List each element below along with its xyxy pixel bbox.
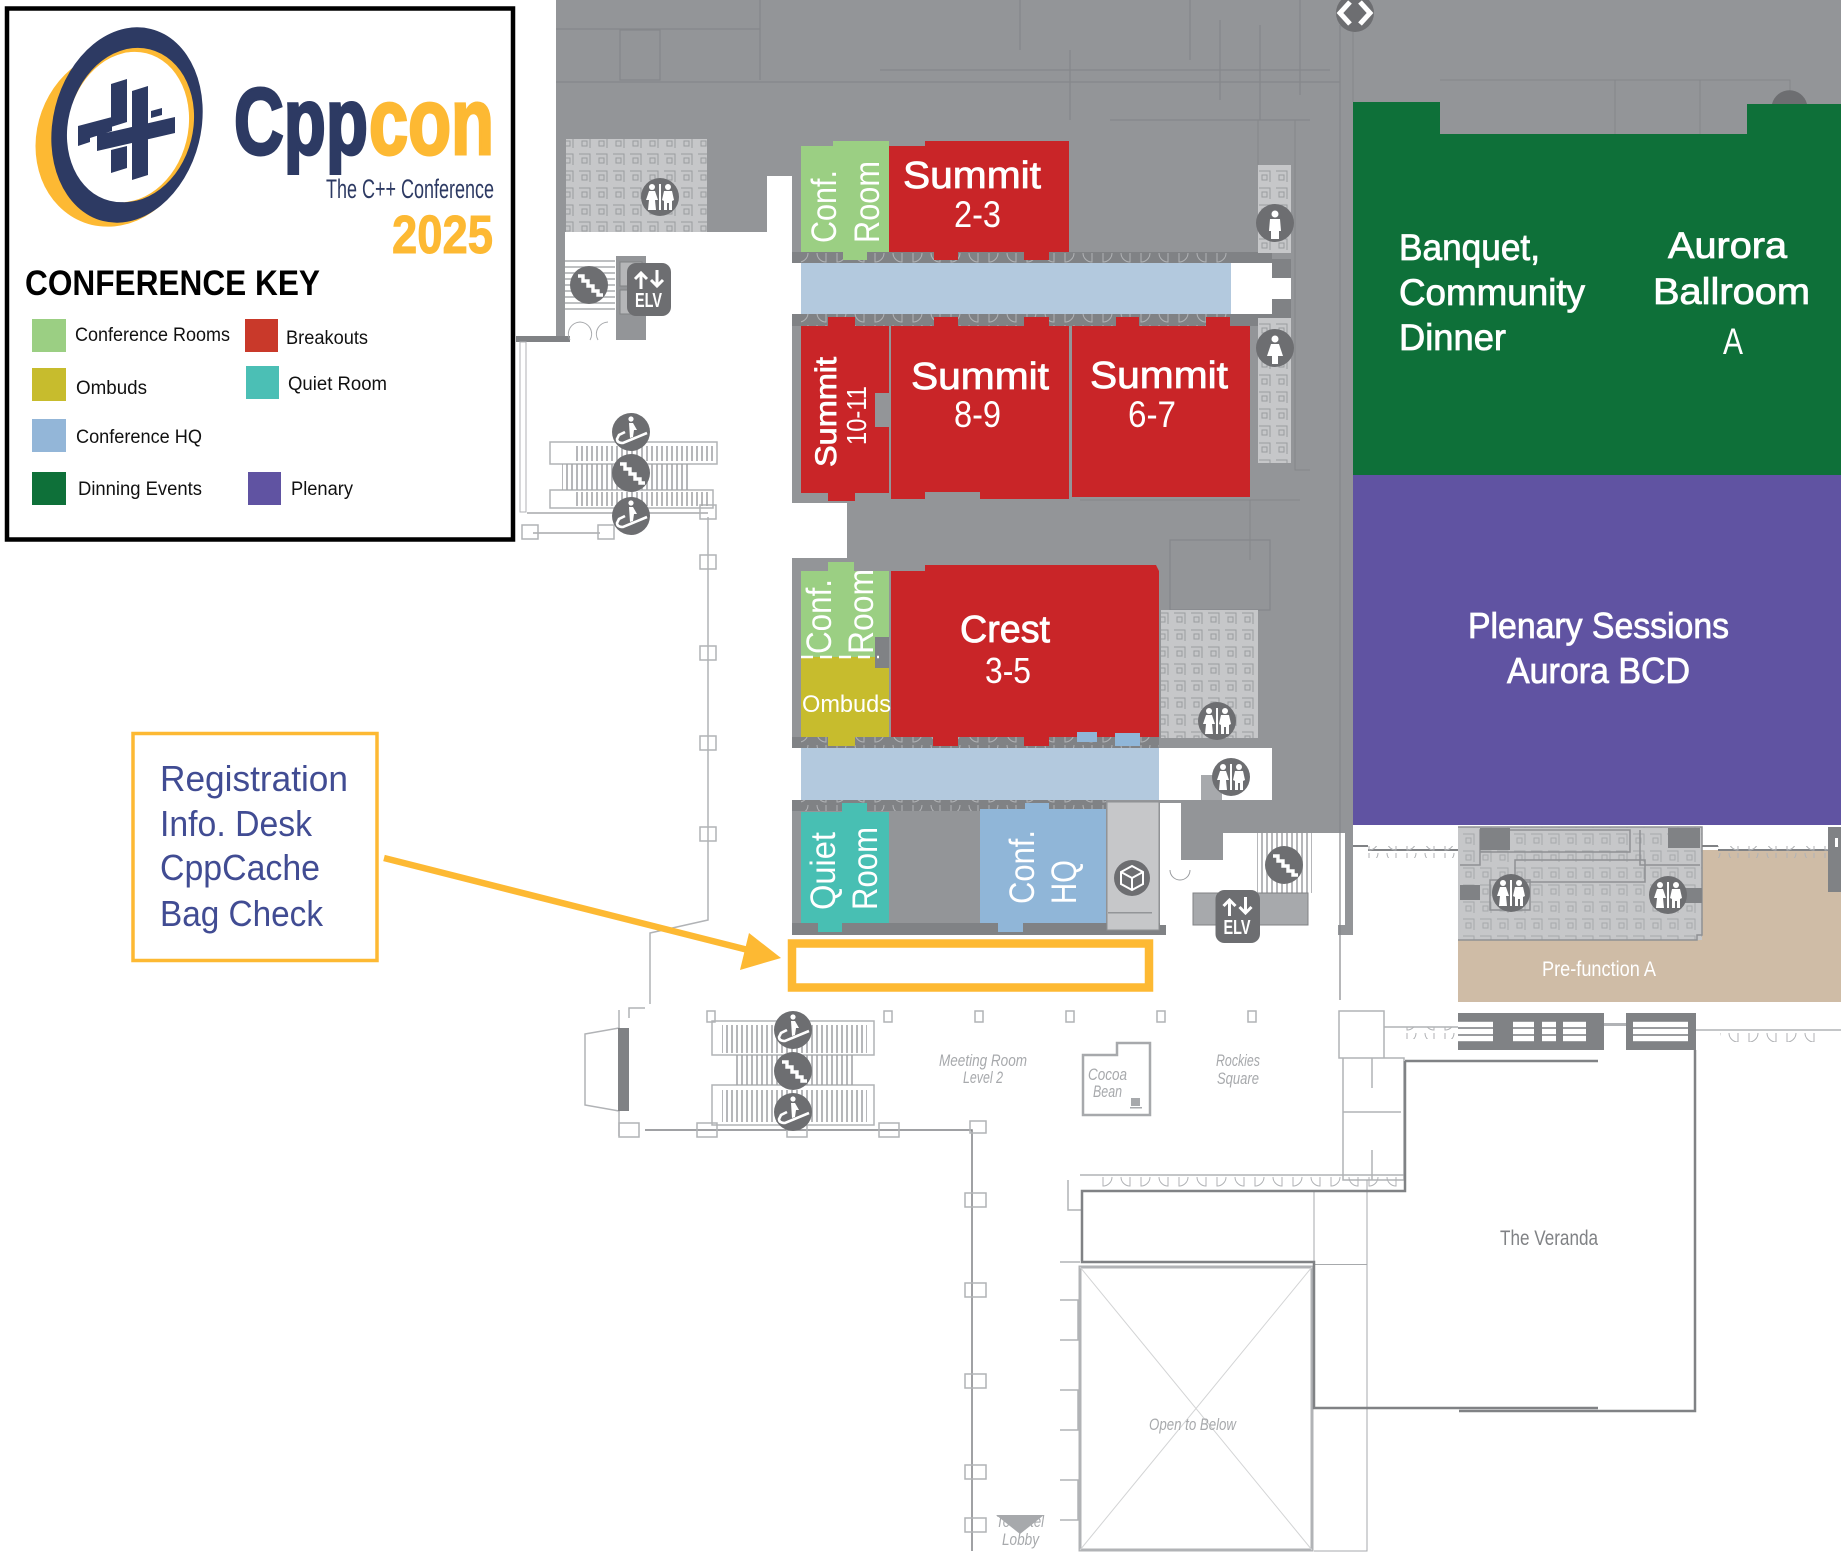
panel: Crest 3-5: 3-5 [985,650,1031,691]
panel: Crest 3-5 [891,565,1159,746]
logo: tagline: The C++ Conference [326,174,494,204]
map labels: italic place names [939,1051,1260,1549]
legend: breakouts [245,319,368,352]
panel: Plenary Sessions Aurora BCD: Plenary Sessions [1468,605,1729,646]
registration area highlight box [792,944,1149,988]
icon: men's restroom [1256,204,1294,242]
panel: Banquet / Aurora Ballroom A (dinning events) [1353,90,1841,475]
panel: Summit 8-9: 8-9 [954,394,1001,435]
panel: Plenary Sessions Aurora BCD [1353,475,1841,825]
logo: Cppcon wordmark: Cpp [234,69,368,175]
map labels: italic place names: To Hotel [996,1512,1045,1531]
panel: Summit 2-3: 2-3 [954,194,1001,235]
icon: stairs lower [774,1052,812,1090]
text: The Veranda: The Veranda [1500,1227,1598,1250]
icon: escalator lower up [774,1011,812,1049]
panel: Conf. Room (middle) [800,562,889,657]
text: banquet label: Dinner [1399,317,1506,358]
panel: conference HQ corridor (upper) [801,263,1231,314]
legend: plenary: Plenary [291,479,353,500]
map labels: italic place names: Cocoa [1088,1065,1127,1084]
panel: Quiet Room [801,803,889,932]
panel: Ombuds: Ombuds [802,691,891,718]
callout: registration list: Bag Check [160,893,324,934]
panel: conference HQ corridor (lower) [801,748,1159,800]
text: banquet label: Community [1399,272,1585,313]
icon: women's restroom [1256,329,1294,367]
panel: Conf. HQ [980,803,1106,932]
legend: conference HQ [32,419,202,452]
legend: breakouts: Breakouts [286,328,368,349]
legend: conference HQ: Conference HQ [76,427,202,448]
icon: stairs lower right [1265,846,1303,884]
icon: elevator lower [1216,890,1260,943]
icon: escalator up [612,413,650,451]
logo: year: 2025 [392,205,493,265]
panel: Summit 8-9: Summit [911,356,1049,398]
panel: Conf. HQ: HQ [1045,860,1084,904]
panel: Conf. Room (top): Room [848,161,887,243]
callout: registration list: CppCache [160,847,320,888]
legend: ombuds [32,368,147,401]
text: aurora ballroom label [1653,225,1810,362]
panel: Conf. HQ: Conf. [1003,830,1042,904]
icon: restroom pre-function right [1649,876,1687,914]
icon: restroom in corridor [1212,758,1250,796]
icon: restroom top left [641,178,679,216]
map labels: italic place names: Rockies [1216,1051,1260,1070]
map labels: italic place names: Open to Below [1149,1415,1237,1434]
logo: CppCon ring and plus signs [11,11,223,249]
icon: stairs top left [570,266,608,304]
icon: elevator upper [627,263,671,316]
panel: Summit 10-11: 10-11 [841,386,872,445]
panel: Summit 10-11 [801,317,889,501]
icon: stairs upper escalator bank [612,454,650,492]
panel: Crest 3-5: Crest [960,609,1050,651]
panel: Conf. Room (middle): Conf. [800,579,839,654]
legend: conference rooms [32,319,230,352]
panel: Summit 8-9 [891,317,1069,499]
panel: Conf. Room (top) [801,141,889,260]
icon: elevator upper: ELV [635,290,662,312]
panel: Summit 2-3 [889,141,1069,260]
map labels: italic place names: Level 2 [963,1068,1003,1087]
icon: escalator lower down [774,1093,812,1131]
panel: Summit 6-7 [1072,317,1250,497]
panel: Quiet Room: Quiet [804,832,843,910]
text: pre-function label: Pre-function A [1542,958,1656,981]
panel: Summit 6-7: 6-7 [1128,394,1176,435]
restrooms: light grey service blocks [565,139,1312,930]
icon: half circle behind ballroom [1772,90,1807,104]
legend: ombuds: Ombuds [76,378,147,399]
icon: restroom beside Crest [1198,702,1236,740]
arrow: registration callout to highlighted area [384,858,781,970]
panel: Summit 10-11: Summit [810,356,843,467]
legend: quiet room [246,366,387,399]
icon: down triangle to hotel lobby [996,1515,1044,1534]
text: aurora ballroom label: Aurora [1668,225,1787,266]
callout: registration list: Info. Desk [160,803,313,844]
panel: Ombuds [801,637,891,746]
map labels: italic place names: Meeting Room [939,1051,1027,1070]
panel: Conf. Room (top): Conf. [805,170,844,243]
panel: Pre-function A with restrooms [1353,827,1841,1002]
map labels: italic place names: Lobby [1002,1530,1040,1549]
icon: elevator lower: ELV [1224,917,1251,939]
legend: dinning events: Dinning Events [78,479,202,500]
icon: bag check box [1114,860,1150,896]
text: banquet label: Banquet, [1399,227,1540,268]
text: aurora ballroom label: Ballroom [1653,271,1810,312]
legend: plenary [248,472,353,505]
panel: Summit 2-3: Summit [903,155,1041,197]
panel: Summit 6-7: Summit [1090,355,1228,397]
panel: Conf. Room (middle): Room [842,569,881,654]
icon: navigation arrows [1336,0,1374,32]
callout: registration list [133,734,377,960]
callout: registration list: Registration [160,758,348,799]
legend: quiet room: Quiet Room [288,374,387,395]
floor plan: lower linework [522,442,1841,1551]
icon: coffee cup [1130,1098,1142,1108]
heading: conference key: CONFERENCE KEY [25,264,320,303]
logo: Cppcon wordmark: con [369,69,494,175]
panel: Plenary Sessions Aurora BCD: Aurora BCD [1507,650,1690,691]
floor plan: upper building footprint [516,0,1841,1000]
icon: escalator down [612,497,650,535]
map labels: italic place names: Square [1217,1069,1259,1088]
legend: dinning events [32,472,202,505]
panel: conference key [7,8,513,540]
panel: Quiet Room: Room [846,827,885,910]
icon: restroom pre-function left [1492,874,1530,912]
map labels: italic place names: Bean [1093,1082,1122,1101]
legend: conference rooms: Conference Rooms [75,325,230,346]
band of dark structural walls with stair windows [1458,1013,1696,1050]
text: banquet label [1399,227,1585,358]
text: aurora ballroom label: A [1723,321,1743,362]
